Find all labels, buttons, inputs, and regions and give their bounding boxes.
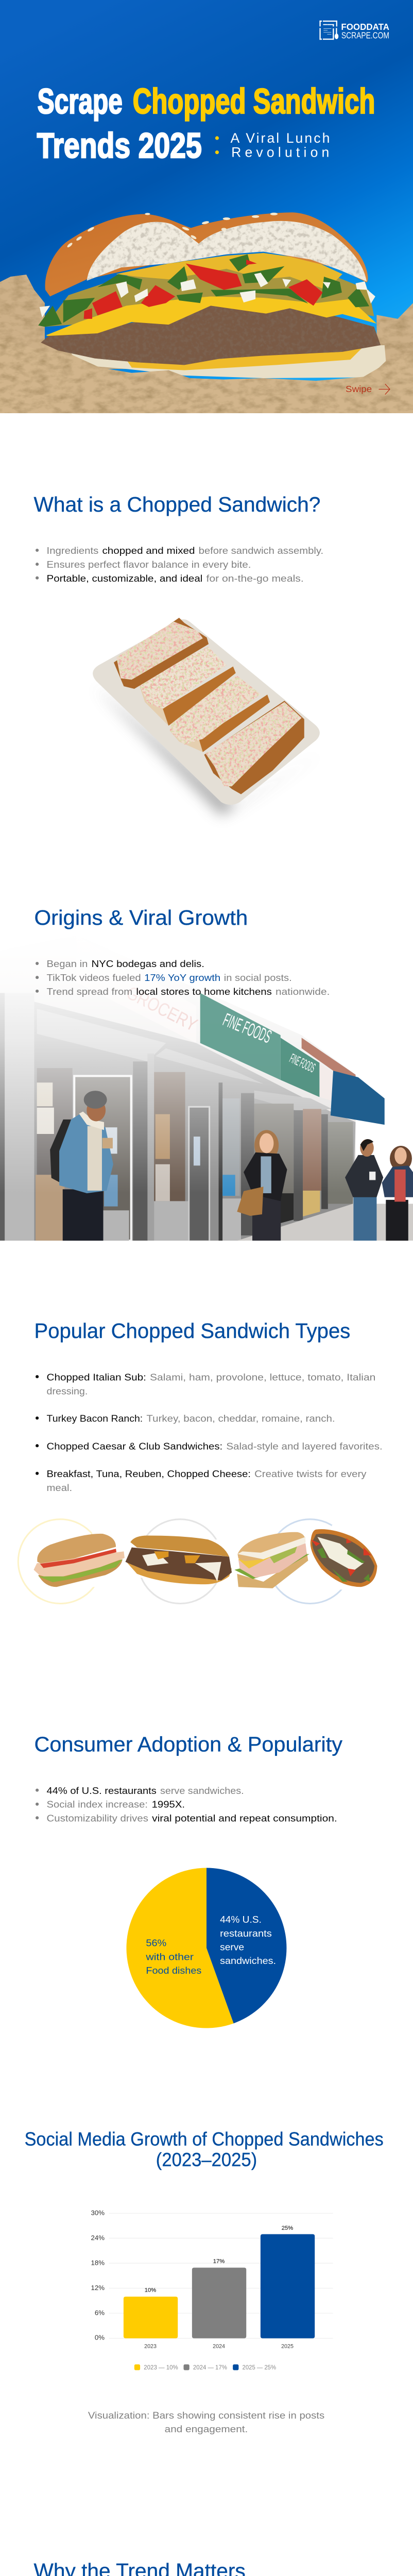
bullet list: Chopped Caesar & Club Sandwiches:	[47, 1441, 222, 1452]
person one	[50, 1091, 113, 1242]
bullet list: before sandwich assembly.	[199, 546, 323, 556]
bullet list: Breakfast, Tuna, Reuben, Chopped Cheese:	[47, 1469, 251, 1480]
bar 2025: 25%	[282, 2225, 293, 2231]
bar chart	[91, 2209, 333, 2371]
bar 2024: 2024	[213, 2344, 225, 2350]
pie label: 56%: with other	[145, 1952, 194, 1963]
bullet list	[36, 546, 323, 584]
sub 4	[204, 701, 304, 794]
pie slice: 44% restaurants	[206, 1868, 286, 2023]
sesame seeds	[66, 213, 278, 248]
lettuce	[38, 255, 369, 327]
bullet list: Salad-style and layered favorites.	[226, 1441, 383, 1452]
hero banner	[0, 0, 413, 413]
ground beef	[41, 300, 381, 365]
bullet list: Turkey Bacon Ranch:	[47, 1414, 143, 1425]
section: what is a chopped sandwich	[33, 493, 323, 821]
y axis labels: 30%	[91, 2209, 105, 2217]
image: storefront street scene: FINE FOODS	[287, 1051, 317, 1075]
bullet list: chopped and mixed	[102, 546, 195, 556]
title	[37, 81, 375, 165]
bullet list	[36, 959, 330, 997]
filling base	[45, 256, 374, 327]
heading	[25, 2129, 384, 2171]
swipe hint	[346, 384, 390, 395]
legend: 2025 — 25%	[243, 2364, 277, 2371]
subtitle	[215, 130, 330, 160]
people	[50, 1091, 413, 1242]
left pillar	[0, 993, 5, 1241]
bar 2024: 17%	[213, 2258, 225, 2264]
legend: 2024 — 17%	[193, 2364, 227, 2371]
bullet list: dressing.	[47, 1386, 88, 1397]
bullet list: for on-the-go meals.	[206, 573, 304, 584]
sub 3	[170, 675, 270, 752]
onion	[40, 273, 375, 317]
pie label: 56%: Food dishes	[146, 1965, 201, 1976]
heading: Consumer Adoption & Popularity	[34, 1732, 342, 1756]
hero background sand dunes	[0, 275, 413, 369]
image: turkey sub	[33, 1534, 125, 1587]
blue awning	[331, 1071, 385, 1125]
section: social media growth	[25, 2129, 384, 2435]
bar 2025: 2025	[281, 2344, 294, 2350]
section: consumer adoption and popularity	[34, 1732, 343, 2028]
pie label: 44%: 44% U.S.	[220, 1914, 262, 1925]
heading: Social Media Growth of Chopped Sandwiches	[25, 2129, 384, 2150]
bullet list: Salami, ham, provolone, lettuce, tomato, Italian	[150, 1372, 375, 1383]
bullet list: meal.	[47, 1483, 72, 1494]
subtitle: Revolution	[231, 144, 329, 160]
teal awnings	[200, 993, 319, 1097]
person three	[345, 1139, 383, 1241]
teal awnings: FINE FOODS	[220, 1009, 274, 1047]
bullet list	[36, 1372, 383, 1494]
pie label: 44%: restaurants	[220, 1928, 272, 1939]
chart caption: and engagement.	[165, 2424, 248, 2435]
pie label: 44%	[220, 1914, 276, 1967]
upper cheese	[46, 296, 376, 336]
mustard layer	[116, 253, 342, 290]
bar 2023	[124, 2287, 178, 2350]
bullet list: Customizability drives	[47, 1814, 148, 1824]
image: storefront street scene	[0, 987, 413, 1241]
swipe hint: Swipe	[346, 384, 372, 394]
windows and doors	[36, 1054, 353, 1241]
y axis labels: 12%	[91, 2284, 105, 2292]
section: popular chopped sandwich types	[18, 1319, 383, 1604]
pie slice: 56% other food dishes	[126, 1868, 234, 2028]
bullet list: Began in	[47, 959, 88, 970]
top bun crust	[45, 212, 368, 296]
bullet list: Turkey, bacon, cheddar, romaine, ranch.	[146, 1414, 335, 1425]
image: chopped subs on a plate	[93, 618, 324, 816]
bullet list: Ingredients	[47, 546, 98, 556]
bullet list: Trend spread from	[47, 987, 132, 997]
decorative rings	[18, 1519, 388, 1603]
bullet list: Portable, customizable, and ideal	[47, 573, 202, 584]
person four	[382, 1146, 413, 1242]
y axis labels: 6%	[95, 2309, 105, 2317]
image: cheesesteak sub	[125, 1536, 232, 1584]
brick and white sign	[302, 1038, 355, 1104]
deli sign	[76, 935, 196, 1043]
bullet list: 1995X.	[152, 1799, 185, 1810]
bottom bun	[71, 345, 386, 378]
sub 1	[114, 618, 209, 689]
bullet list: viral potential and repeat consumption.	[152, 1814, 337, 1824]
bar 2025	[261, 2225, 315, 2350]
bullet list	[36, 1786, 337, 1824]
plate	[93, 619, 320, 805]
hero sandwich illustration	[38, 212, 386, 378]
heading: Popular Chopped Sandwich Types	[34, 1319, 350, 1343]
bullet list: Ensures perfect flavor balance in every bite.	[47, 560, 251, 570]
person two	[237, 1130, 287, 1241]
bullet list: nationwide.	[276, 987, 330, 997]
pie label: 56%	[145, 1938, 201, 1976]
title: Trends 2025	[37, 126, 202, 165]
chart caption: Visualization: Bars showing consistent rise in posts	[88, 2411, 324, 2421]
section: origins and viral growth	[0, 906, 413, 1241]
legend	[134, 2364, 277, 2371]
y axis labels: 0%	[95, 2334, 105, 2342]
bullet list: Social index increase:	[47, 1799, 148, 1810]
heading: (2023–2025)	[156, 2149, 257, 2171]
bar 2023: 2023	[144, 2344, 157, 2350]
bullet list: NYC bodegas and delis.	[91, 959, 204, 970]
bar 2023: 10%	[145, 2287, 156, 2294]
logo: white: FOODDATA	[341, 22, 389, 32]
y axis labels: 24%	[91, 2234, 105, 2242]
sidewalk	[237, 1204, 413, 1241]
tomato	[84, 260, 323, 319]
sub 2	[139, 647, 236, 726]
bullet list: Chopped Italian Sub:	[47, 1372, 146, 1383]
title: Scrape	[38, 81, 123, 121]
facade	[106, 1020, 355, 1204]
heading: Origins & Viral Growth	[34, 906, 248, 929]
subtitle: A Viral Lunch	[231, 130, 330, 146]
pie label: 56%: 56%	[146, 1938, 166, 1948]
bar 2024	[192, 2258, 246, 2350]
logo: white: SCRAPE.COM	[341, 30, 389, 41]
shop front	[0, 993, 355, 1241]
hero foreground sand	[0, 340, 413, 413]
shutters	[37, 1021, 166, 1061]
bullet list: 44% of U.S. restaurants	[47, 1786, 157, 1797]
bullet list: TikTok videos fueled	[47, 973, 141, 984]
bullet list: serve sandwiches.	[160, 1786, 244, 1797]
y axis labels	[91, 2209, 105, 2342]
bullet list: local stores to home kitchens	[136, 987, 272, 997]
bullet list: in social posts.	[224, 973, 292, 984]
fade overlay	[0, 935, 355, 1184]
image: storefront street scene: GROCERY	[123, 982, 201, 1036]
pie label: 44%: sandwiches.	[220, 1956, 276, 1967]
logo: white	[319, 21, 389, 41]
top bun crumb	[87, 221, 367, 281]
bullet list: Creative twists for every	[254, 1469, 367, 1480]
heading: What is a Chopped Sandwich?	[33, 493, 320, 516]
y axis labels: 18%	[91, 2259, 105, 2266]
pie chart	[126, 1868, 286, 2028]
pie label: 44%: serve	[220, 1942, 244, 1953]
legend: 2023 — 10%	[144, 2364, 178, 2371]
image: open cheesesteak	[311, 1529, 377, 1587]
image: club sandwich	[234, 1532, 309, 1588]
bottom cheese	[124, 341, 369, 370]
chart caption	[88, 2411, 324, 2435]
bullet list: 17% YoY growth	[144, 973, 220, 984]
